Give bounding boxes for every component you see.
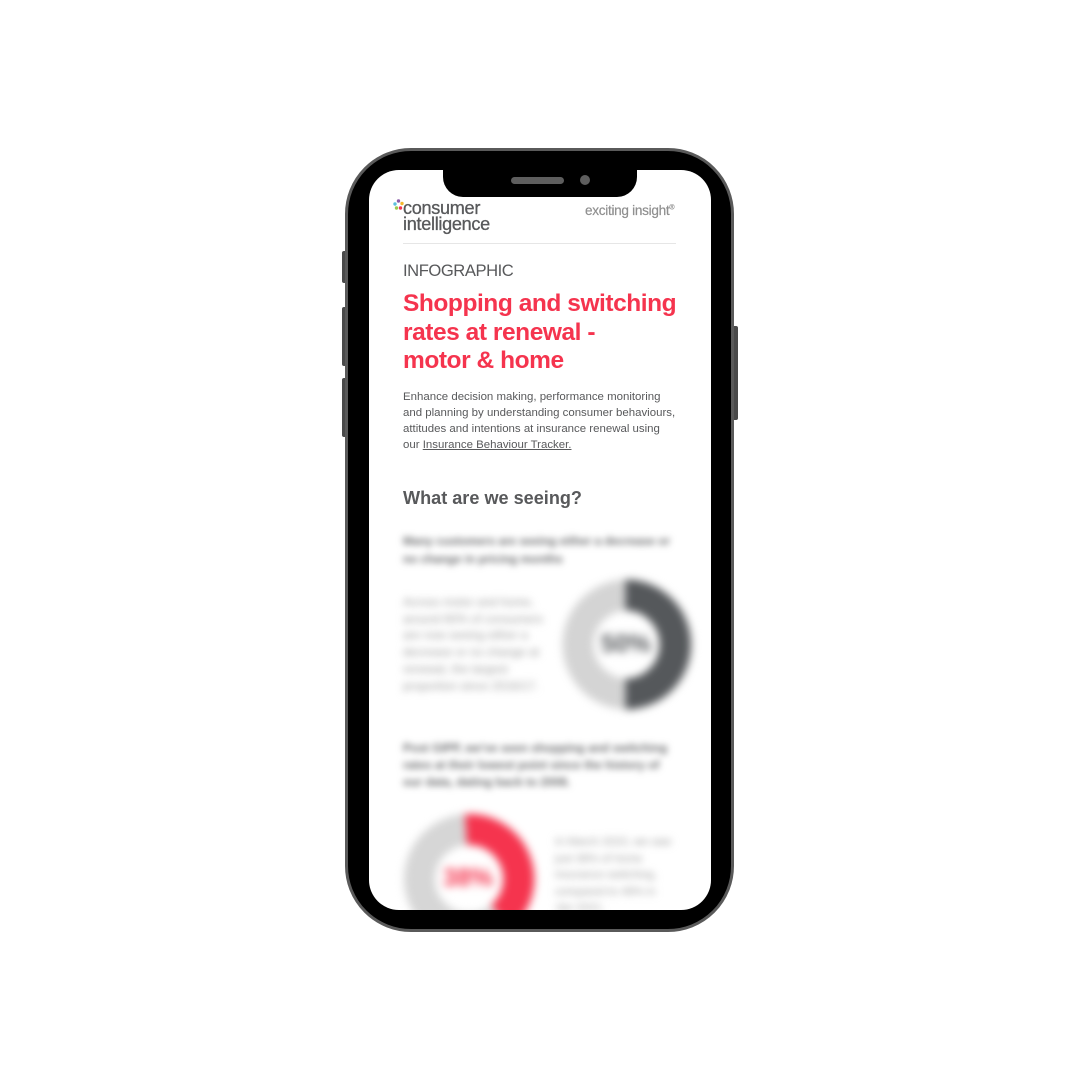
blurred paragraph 1 bbox=[400, 595, 544, 694]
blurred paragraph 1: are now seeing either a bbox=[403, 628, 528, 642]
title: Shopping and switching bbox=[403, 290, 676, 317]
section heading: What are we seeing? bbox=[403, 488, 582, 508]
header rule bbox=[403, 243, 676, 244]
blurred statement 1 bbox=[400, 532, 672, 569]
intro text bbox=[403, 391, 675, 451]
blurred paragraph 1: Across motor and home, bbox=[403, 595, 534, 609]
blurred paragraph 2: insurance switching, bbox=[555, 869, 657, 881]
blurred statement 2: rates at their lowest point since the history of bbox=[403, 758, 659, 772]
blurred statement 2 bbox=[399, 739, 671, 792]
button: left volume down bbox=[342, 378, 348, 437]
eyebrow: INFOGRAPHIC bbox=[403, 261, 513, 280]
blurred statement 2: Post GIPP, we've seen shopping and switching bbox=[403, 741, 667, 755]
blurred statement 1: Many customers are seeing either a decrease or bbox=[403, 535, 670, 548]
blurred paragraph 2: compared to 48% in bbox=[555, 886, 655, 898]
blurred paragraph 2: In March 2023, we saw bbox=[555, 836, 671, 848]
speaker bbox=[511, 177, 564, 184]
blurred statement 2: our data, dating back to 2008. bbox=[403, 775, 570, 789]
intro text: our Insurance Behaviour Tracker. bbox=[403, 439, 571, 451]
donut chart: 38% bbox=[400, 807, 542, 910]
phone frame bbox=[345, 148, 734, 932]
intro text: and planning by understanding consumer behaviours, bbox=[403, 407, 675, 419]
blurred paragraph 1: decrease or no change at bbox=[403, 645, 539, 659]
donut chart: 50% bbox=[559, 573, 698, 716]
blurred statement 1: no change in pricing months bbox=[403, 553, 563, 566]
donut chart: 50%: 50% bbox=[601, 630, 651, 658]
title: rates at renewal - bbox=[403, 318, 595, 346]
blurred paragraph 1: around 60% of consumers bbox=[403, 612, 543, 626]
logo wordmark: consumer bbox=[403, 198, 480, 218]
phone screen bbox=[369, 170, 711, 910]
tagline: exciting insight® bbox=[585, 203, 674, 218]
title bbox=[403, 290, 676, 374]
button: right power bbox=[732, 326, 738, 420]
logo mark bbox=[393, 199, 404, 210]
blurred paragraph 2: just 38% of home bbox=[555, 852, 642, 864]
intro text: attitudes and intentions at insurance renewal using bbox=[403, 423, 660, 435]
title: motor & home bbox=[403, 347, 564, 374]
donut chart: 38%: 38% bbox=[443, 864, 493, 892]
camera bbox=[580, 175, 590, 185]
intro text: Enhance decision making, performance monitoring bbox=[403, 391, 660, 403]
blurred paragraph 2 bbox=[553, 835, 672, 910]
logo wordmark bbox=[403, 198, 490, 234]
blurred paragraph 1: renewal, the largest bbox=[403, 662, 508, 676]
logo wordmark: intelligence bbox=[403, 214, 490, 234]
blurred paragraph 1: proportion since 2016/17. bbox=[403, 679, 538, 693]
button: left volume up bbox=[342, 307, 348, 366]
notch bbox=[443, 170, 637, 197]
button: left mute bbox=[342, 251, 348, 283]
